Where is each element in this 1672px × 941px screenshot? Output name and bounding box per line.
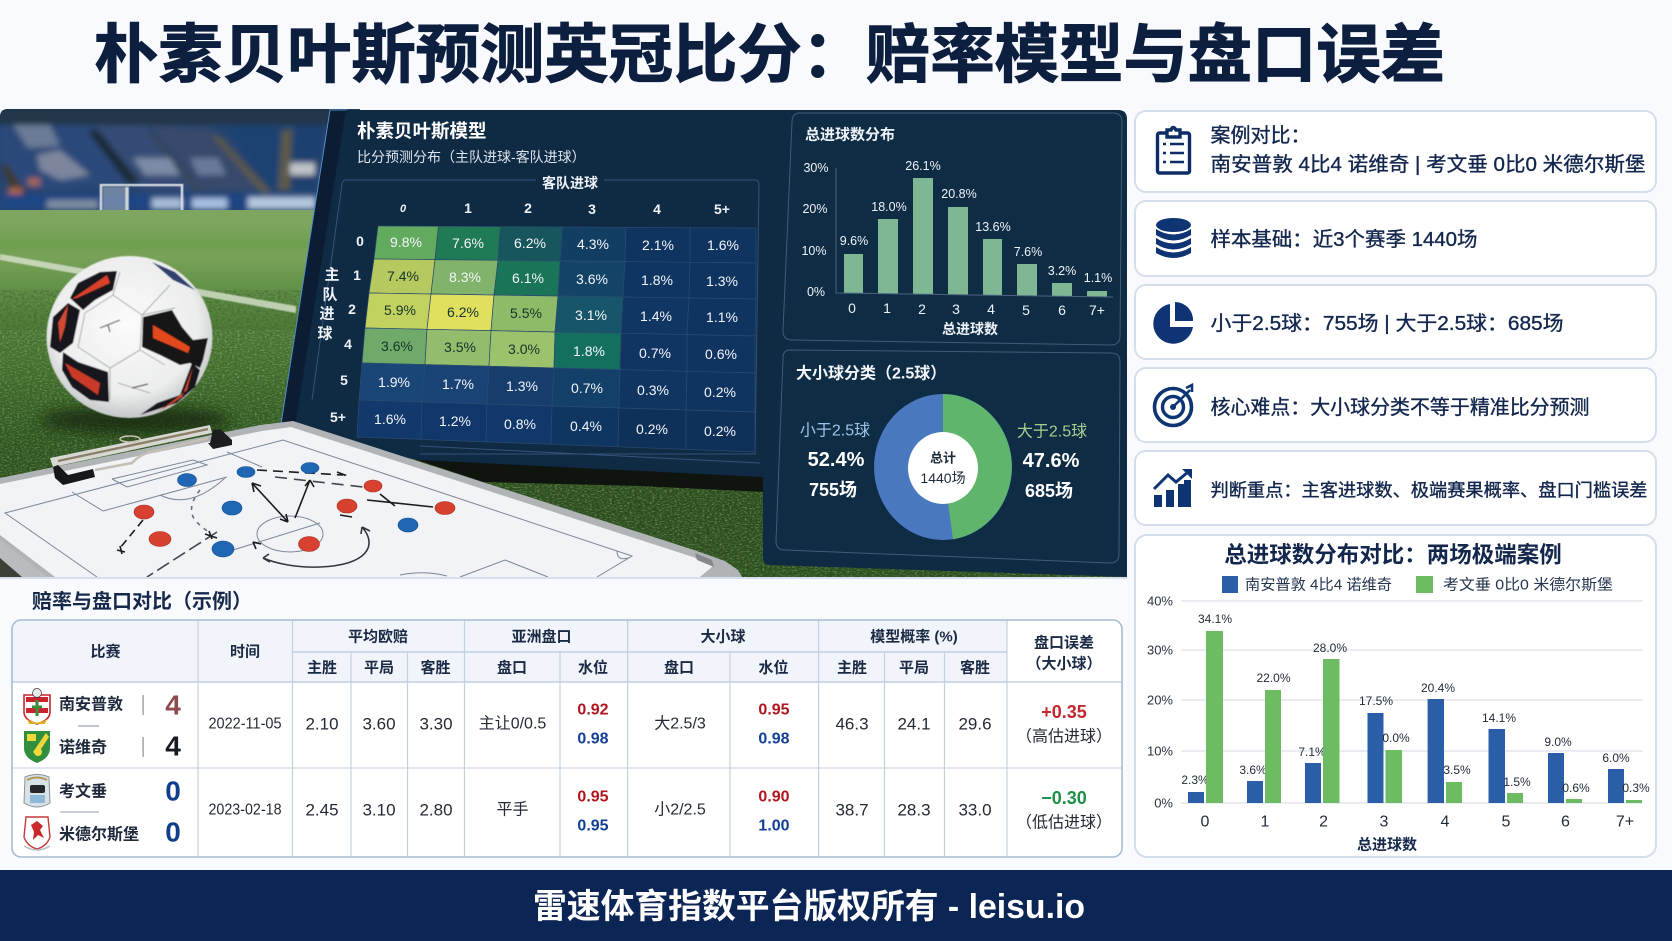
table row: Coventry vs Middlesbrough: 0.95 [577, 788, 609, 806]
total goals axis and value labels: 7.6% [1014, 245, 1042, 259]
total goals axis and value labels [801, 159, 1112, 337]
total goals axis and value labels: 0% [807, 285, 825, 299]
footer band: 雷速体育指数平台版权所有 - leisu.io [533, 888, 1085, 926]
card: sample base [1135, 201, 1656, 276]
table row: Coventry vs Middlesbrough: 3.10 [362, 800, 396, 820]
table row: Southampton vs Norwich: 大2.5/3 [654, 714, 706, 732]
table row: Coventry vs Middlesbrough: 小2/2.5 [654, 800, 706, 818]
table row: Southampton vs Norwich: 0.98 [577, 730, 609, 748]
heatmap axis title: home goals [317, 266, 340, 342]
coventry bar value labels [1198, 612, 1650, 795]
hero photo panel: stadium, ball, tactics board, model dashboard [0, 105, 1130, 577]
heatmap frame [312, 180, 760, 463]
heatmap values: 0.7% [639, 345, 671, 361]
chart value labels behind bars: 14.1% [1482, 711, 1516, 725]
chart x axis: 6 [1561, 814, 1570, 830]
table row: Southampton vs Norwich: （高估进球） [1016, 728, 1112, 746]
chart value labels behind bars: 3.6% [1239, 763, 1267, 777]
table row: Southampton vs Norwich: 29.6 [958, 714, 992, 734]
heatmap values: 1.6% [374, 411, 406, 427]
heatmap axis title: away goals: 客队进球 [542, 175, 598, 191]
over 2.5 stats: 685场 [1025, 481, 1073, 501]
heatmap row labels: 1 [353, 267, 361, 283]
heatmap values: 5.5% [510, 305, 542, 321]
heatmap values: 6.2% [447, 304, 479, 320]
table row: Southampton vs Norwich: 2022-11-05 [208, 716, 282, 732]
heatmap values: 0.3% [637, 382, 669, 398]
heatmap values: 0.4% [570, 418, 602, 434]
total goals axis and value labels: 20.8% [941, 187, 977, 201]
total goals axis and value labels: 总进球数 [942, 321, 998, 337]
heatmap values: 1.4% [640, 308, 672, 324]
table row: Southampton vs Norwich: 3.30 [419, 714, 453, 734]
icon: target [1154, 385, 1192, 426]
dashboard title: 朴素贝叶斯模型 [357, 120, 487, 142]
case comparison text: 案例对比： [1210, 124, 1310, 147]
core difficulty text: 核心难点：大小球分类不等于精准比分预测 [1210, 396, 1590, 419]
table row: Coventry vs Middlesbrough: 33.0 [958, 800, 992, 820]
heatmap values: 1.9% [378, 374, 410, 390]
table headers: 盘口误差 [1034, 634, 1094, 652]
case comparison text [1210, 124, 1646, 176]
team: Southampton 4: 4 [165, 690, 181, 720]
heatmap axis title: home goals: 球 [317, 324, 333, 342]
heatmap row labels [330, 233, 364, 425]
heatmap values: 0.2% [636, 421, 668, 437]
panel: over under split [776, 350, 1120, 563]
total goals axis and value labels: 20% [802, 202, 828, 216]
donut chart [874, 394, 1012, 540]
heatmap column labels: 4 [653, 201, 661, 217]
icon: clipboard [1158, 128, 1190, 173]
icon: Norwich crest [24, 731, 50, 763]
chart value labels behind bars: 7.1% [1298, 745, 1326, 759]
football [46, 256, 212, 418]
table row: Coventry vs Middlesbrough: 平手 [496, 800, 529, 818]
icon: Coventry crest [24, 774, 50, 807]
table headers: 大小球 [700, 628, 746, 646]
coventry bar value labels: 3.5% [1443, 763, 1471, 777]
table row: Southampton vs Norwich [208, 702, 1112, 748]
blue team markers [178, 462, 418, 557]
table headers: 盘口 [497, 658, 527, 676]
footer band [0, 870, 1672, 941]
table row: Coventry vs Middlesbrough: 2.80 [419, 800, 453, 820]
coventry bar value labels: 28.0% [1313, 641, 1347, 655]
coventry bar value labels: 0.0% [1382, 731, 1410, 745]
case comparison text: 南安普敦 4比4 诺维奇 | 考文垂 0比0 米德尔斯堡 [1210, 153, 1646, 176]
stadium background [0, 105, 360, 212]
table row: Coventry vs Middlesbrough: 28.3 [897, 800, 931, 820]
table row: Coventry vs Middlesbrough: 0.90 [758, 788, 790, 806]
total goals axis and value labels: 2 [918, 301, 926, 317]
southampton vs norwich bars [1188, 699, 1624, 803]
donut chart: 总计 [930, 450, 956, 466]
total goals axis and value labels: 26.1% [905, 159, 941, 173]
table headers: 盘口 [664, 658, 694, 676]
heatmap values: 1.8% [573, 343, 605, 359]
card: core difficulty [1135, 368, 1656, 442]
heatmap values: 0.2% [704, 423, 736, 439]
table headers: 水位 [758, 658, 789, 676]
chart value labels behind bars [1181, 681, 1630, 787]
total goals bars [844, 178, 1107, 297]
table headers [90, 628, 1102, 676]
table row: Southampton vs Norwich: 46.3 [835, 714, 869, 734]
heatmap values: 1.7% [442, 376, 474, 392]
table headers: 平均欧赔 [348, 628, 408, 646]
heatmap column labels: 0 [400, 203, 407, 215]
table headers: 客胜 [420, 658, 451, 676]
team: Norwich 4: 4 [165, 730, 181, 762]
chart x axis [1201, 814, 1634, 854]
table row: Southampton vs Norwich: 24.1 [897, 714, 931, 734]
table row: Coventry vs Middlesbrough: 0.95 [577, 818, 609, 834]
total goals axis and value labels: 1.1% [1084, 271, 1112, 285]
table headers: 亚洲盘口 [511, 628, 572, 646]
chart gridlines and y axis [1147, 594, 1643, 810]
chart x axis: 5 [1502, 814, 1511, 830]
dashboard bezel [281, 110, 348, 424]
total goals axis and value labels: 9.6% [840, 234, 868, 248]
over 2.5 stats [1017, 422, 1087, 501]
tactics whiteboard [0, 421, 742, 577]
heatmap values: 9.8% [390, 234, 422, 250]
heatmap values: 0.8% [504, 416, 536, 432]
heatmap values: 7.4% [387, 268, 419, 284]
heatmap values [374, 234, 739, 439]
heatmap values: 3.6% [381, 338, 413, 354]
heatmap values: 0.2% [704, 384, 736, 400]
chart gridlines and y axis: 40% [1147, 594, 1173, 608]
coventry bar value labels: 34.1% [1198, 612, 1232, 626]
heatmap values: 5.9% [384, 302, 416, 318]
heatmap values: 7.6% [452, 235, 484, 251]
pitch grass [0, 210, 1130, 577]
chart x axis: 3 [1380, 814, 1389, 830]
heatmap values: 1.3% [506, 378, 538, 394]
total goals axis and value labels: 6 [1058, 302, 1066, 318]
total goals axis and value labels: 0 [848, 300, 856, 316]
over under counts text: 小于2.5球：755场 | 大于2.5球：685场 [1210, 312, 1564, 335]
team: Southampton 4: 南安普敦 [59, 694, 123, 714]
team: Coventry 0: 考文垂 [59, 782, 107, 800]
table row: Coventry vs Middlesbrough: （低估进球） [1016, 814, 1112, 832]
panel: goal distribution comparison chart [1135, 535, 1656, 857]
team: Middlesbrough 0: 米德尔斯堡 [59, 824, 139, 844]
table row: Southampton vs Norwich: 0.98 [758, 730, 790, 748]
team: Norwich 4: 诺维奇 [59, 738, 107, 756]
title: 朴素贝叶斯预测英冠比分：赔率模型与盘口误差 [94, 19, 1445, 91]
chart value labels behind bars: 2.3% [1181, 773, 1209, 787]
table row: Southampton vs Norwich: 0.95 [758, 702, 790, 718]
team: Middlesbrough 0: 0 [165, 816, 181, 848]
coventry bar value labels: 22.0% [1256, 671, 1291, 685]
table row: Southampton vs Norwich: +0.35 [1041, 702, 1087, 722]
table row: Coventry vs Middlesbrough: 38.7 [835, 800, 869, 820]
table row: Coventry vs Middlesbrough [208, 788, 1112, 834]
chart legend: 南安普敦 4比4 诺维奇 [1245, 576, 1392, 594]
total goals axis and value labels: 30% [803, 161, 829, 175]
chart gridlines and y axis: 0% [1154, 796, 1173, 810]
chart x axis: 1 [1261, 814, 1270, 830]
table headers: 平局 [364, 660, 394, 676]
chart value labels behind bars: 9.0% [1544, 735, 1572, 749]
total goals axis and value labels: 18.0% [871, 200, 907, 214]
total goals axis and value labels: 3 [952, 301, 960, 317]
chart legend [1222, 576, 1613, 594]
icon: rising chart [1154, 469, 1192, 507]
heatmap row labels: 4 [344, 336, 352, 352]
over 2.5 stats: 大于2.5球 [1017, 422, 1087, 440]
dashboard board [290, 110, 1127, 577]
photo bottom rule [0, 577, 1127, 579]
heatmap values: 0.7% [571, 380, 603, 396]
heatmap values: 0.6% [705, 346, 737, 362]
heatmap column labels: 5+ [714, 201, 730, 217]
total goals axis and value labels: 10% [801, 244, 827, 258]
over 2.5 stats: 47.6% [1023, 450, 1080, 472]
grass texture [0, 290, 1130, 577]
chart gridlines and y axis: 30% [1147, 642, 1173, 658]
ball shadow [40, 406, 230, 434]
team: Southampton 4 [59, 690, 181, 720]
total goals axis and value labels: 1 [883, 300, 891, 316]
table headers: 时间 [230, 644, 260, 660]
coventry bar value labels: 0.6% [1562, 781, 1590, 795]
heatmap values: 8.3% [449, 269, 481, 285]
icon: database [1156, 218, 1191, 258]
table row: Coventry vs Middlesbrough: 2023-02-18 [208, 802, 282, 818]
heatmap column labels [400, 204, 730, 214]
heatmap row labels: 5 [340, 372, 348, 388]
heatmap values: 6.2% [514, 235, 546, 251]
under 2.5 stats: 52.4% [808, 449, 865, 471]
under 2.5 stats: 755场 [809, 480, 857, 500]
heatmap values: 6.1% [512, 270, 544, 286]
total goals axis and value labels: 4 [987, 301, 995, 317]
table headers: 水位 [578, 658, 608, 676]
table headers: 主胜 [307, 658, 337, 676]
judgement focus text: 判断重点：主客进球数、极端赛果概率、盘口门槛误差 [1210, 480, 1648, 500]
table row: Coventry vs Middlesbrough: 1.00 [758, 818, 790, 834]
team: Middlesbrough 0 [59, 816, 181, 848]
chart x axis: 7+ [1616, 814, 1634, 830]
dashboard subtitle: 比分预测分布（主队进球-客队进球） [357, 149, 586, 165]
chart value labels behind bars: 17.5% [1359, 694, 1393, 708]
team: Coventry 0: 0 [165, 776, 181, 806]
table heading: 赔率与盘口对比（示例） [32, 590, 252, 613]
table headers: 比赛 [90, 642, 121, 660]
card: case comparison [1135, 111, 1656, 192]
table headers: 客胜 [960, 658, 990, 676]
panel stand shadow [408, 457, 765, 492]
icon: Middlesbrough crest [24, 817, 50, 850]
card: over under counts [1135, 285, 1656, 359]
board arrows [117, 470, 433, 577]
icon: pie chart [1153, 302, 1193, 344]
heatmap axis title: home goals: 进 [319, 306, 335, 322]
total goals axis and value labels: 13.6% [975, 220, 1011, 234]
total goals axis and value labels: 5 [1022, 302, 1030, 318]
pitch line [0, 254, 296, 313]
coventry bar value labels: 1.5% [1503, 775, 1531, 789]
over under heading: 大小球分类（2.5球） [796, 364, 946, 382]
red team markers [134, 480, 455, 552]
heatmap column labels: 1 [464, 200, 472, 216]
table row: Coventry vs Middlesbrough: 2.45 [305, 800, 339, 820]
heatmap values: 3.6% [576, 271, 608, 287]
table row: Southampton vs Norwich: 3.60 [362, 714, 396, 734]
icon: Southampton crest [24, 688, 50, 724]
panel: total goals distribution [783, 113, 1122, 345]
heatmap column labels: 2 [524, 200, 532, 216]
clipboard clip [50, 425, 232, 485]
heatmap values: 3.1% [575, 307, 607, 323]
heatmap values: 1.3% [706, 273, 738, 289]
table headers: （大小球） [1026, 654, 1102, 672]
chart value labels behind bars: 20.4% [1421, 681, 1455, 695]
coventry bar value labels: 0.3% [1622, 781, 1650, 795]
chart value labels behind bars: 6.0% [1602, 751, 1630, 765]
team: Norwich 4 [59, 730, 181, 762]
chart x axis: 总进球数 [1357, 836, 1417, 854]
total goals axis and value labels: 3.2% [1048, 264, 1076, 278]
table row: Southampton vs Norwich: 主让0/0.5 [479, 714, 546, 732]
chart gridlines and y axis: 20% [1147, 692, 1173, 708]
table row: Coventry vs Middlesbrough: −0.30 [1041, 788, 1087, 808]
heatmap values: 3.5% [444, 339, 476, 355]
table headers: 模型概率 (%) [870, 628, 958, 646]
heatmap axis title: home goals: 队 [322, 286, 338, 304]
panel: odds and handicap table [12, 620, 1122, 857]
chart heading: 总进球数分布对比：两场极端案例 [1224, 542, 1562, 568]
coventry vs middlesbrough bars [1206, 631, 1642, 803]
card: judgement focus [1135, 451, 1656, 525]
goal [101, 185, 182, 212]
heatmap row labels: 0 [356, 233, 364, 249]
total goals heading: 总进球数分布 [805, 126, 895, 144]
under 2.5 stats: 小于2.5球 [800, 422, 870, 440]
chart legend: 考文垂 0比0 米德尔斯堡 [1443, 576, 1613, 594]
chart x axis: 2 [1319, 814, 1328, 830]
heatmap values: 3.0% [508, 341, 540, 357]
heatmap values: 4.3% [577, 236, 609, 252]
table headers: 平局 [899, 660, 929, 676]
donut chart: 1440场 [920, 470, 966, 486]
chart x axis: 4 [1441, 814, 1450, 830]
team: Coventry 0 [59, 776, 181, 806]
heatmap row labels: 5+ [330, 409, 346, 425]
heatmap values: 1.2% [439, 413, 471, 429]
heatmap values: 2.1% [642, 237, 674, 253]
heatmap values: 1.8% [641, 272, 673, 288]
chart x axis: 0 [1201, 814, 1210, 830]
heatmap values: 1.6% [707, 237, 739, 253]
heatmap values: 1.1% [706, 309, 738, 325]
sample base text: 样本基础：近3个赛季 1440场 [1210, 228, 1478, 251]
heatmap axis title: home goals: 主 [324, 266, 340, 284]
heatmap column labels: 3 [588, 201, 596, 217]
board field lines [5, 440, 632, 577]
table row: Southampton vs Norwich: 2.10 [305, 714, 339, 734]
chart gridlines and y axis: 10% [1147, 744, 1173, 758]
under 2.5 stats [800, 422, 870, 500]
total goals axis and value labels: 7+ [1089, 302, 1105, 318]
heatmap row labels: 2 [348, 301, 356, 317]
score probability heatmap [357, 226, 756, 452]
table headers: 主胜 [837, 658, 867, 676]
table row: Southampton vs Norwich: 0.92 [577, 702, 609, 718]
